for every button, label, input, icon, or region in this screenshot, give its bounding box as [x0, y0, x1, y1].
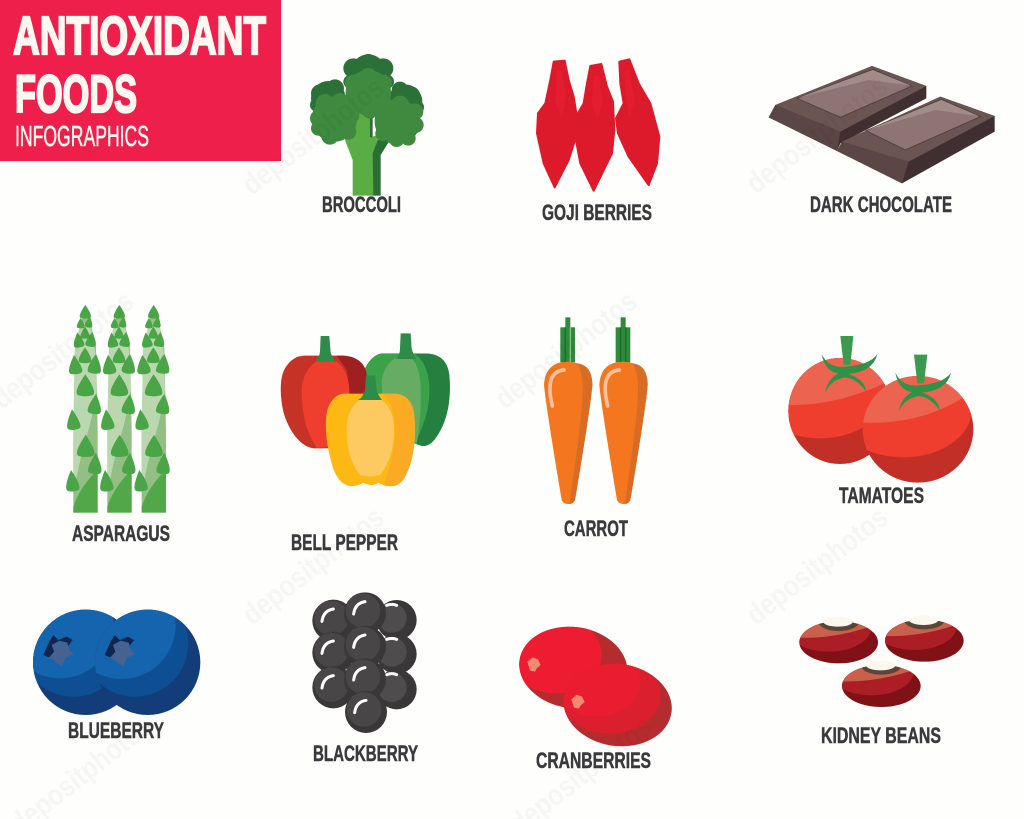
tomato right	[862, 354, 974, 483]
blueberry crown left	[43, 635, 74, 666]
icon: blueberries	[33, 610, 200, 715]
label: goji berries: GOJI BERRIES	[542, 200, 652, 225]
blueberry crown right	[105, 635, 135, 666]
label: asparagus: ASPARAGUS	[72, 521, 170, 546]
label: blackberry: BLACKBERRY	[313, 741, 418, 766]
label: cranberries: CRANBERRIES	[536, 748, 651, 773]
label: broccoli: BROCCOLI	[322, 192, 401, 217]
subheading: infographics: INFOGRAPHICS	[15, 121, 149, 153]
watermark: depositphotos	[740, 70, 894, 201]
icon: cranberries	[519, 626, 672, 746]
label: bell pepper: BELL PEPPER	[291, 530, 398, 555]
icon: tomatoes	[788, 336, 974, 483]
label: blueberry: BLUEBERRY	[68, 718, 164, 743]
label: kidney beans: KIDNEY BEANS	[821, 723, 941, 748]
watermark: depositphotos	[236, 501, 390, 632]
label: carrot: CARROT	[564, 516, 628, 541]
heading: foods: FOODS	[15, 65, 137, 124]
watermark: depositphotos	[489, 285, 643, 416]
icon: asparagus	[64, 305, 171, 513]
icon: broccoli	[310, 54, 424, 196]
watermark: depositphotos	[236, 71, 390, 202]
label: dark chocolate: DARK CHOCOLATE	[810, 192, 952, 217]
label: tomatoes: TAMATOES	[839, 483, 924, 508]
icon: blackberry	[312, 592, 417, 733]
tomato left	[788, 336, 886, 464]
watermark: depositphotos	[740, 501, 894, 632]
cranberry back	[519, 626, 627, 708]
green pepper	[365, 333, 450, 446]
red pepper	[281, 336, 367, 448]
title banner	[0, 0, 281, 161]
watermark	[0, 70, 894, 819]
icon: kidney beans	[786, 601, 964, 707]
icon: carrots	[544, 317, 648, 504]
yellow pepper	[326, 375, 415, 486]
icon: bell peppers	[281, 333, 450, 486]
icon: goji berries	[537, 59, 659, 191]
cranberry front	[564, 664, 672, 746]
heading: antioxidant: ANTIOXIDANT	[13, 6, 266, 66]
icon: dark chocolate	[769, 66, 995, 183]
